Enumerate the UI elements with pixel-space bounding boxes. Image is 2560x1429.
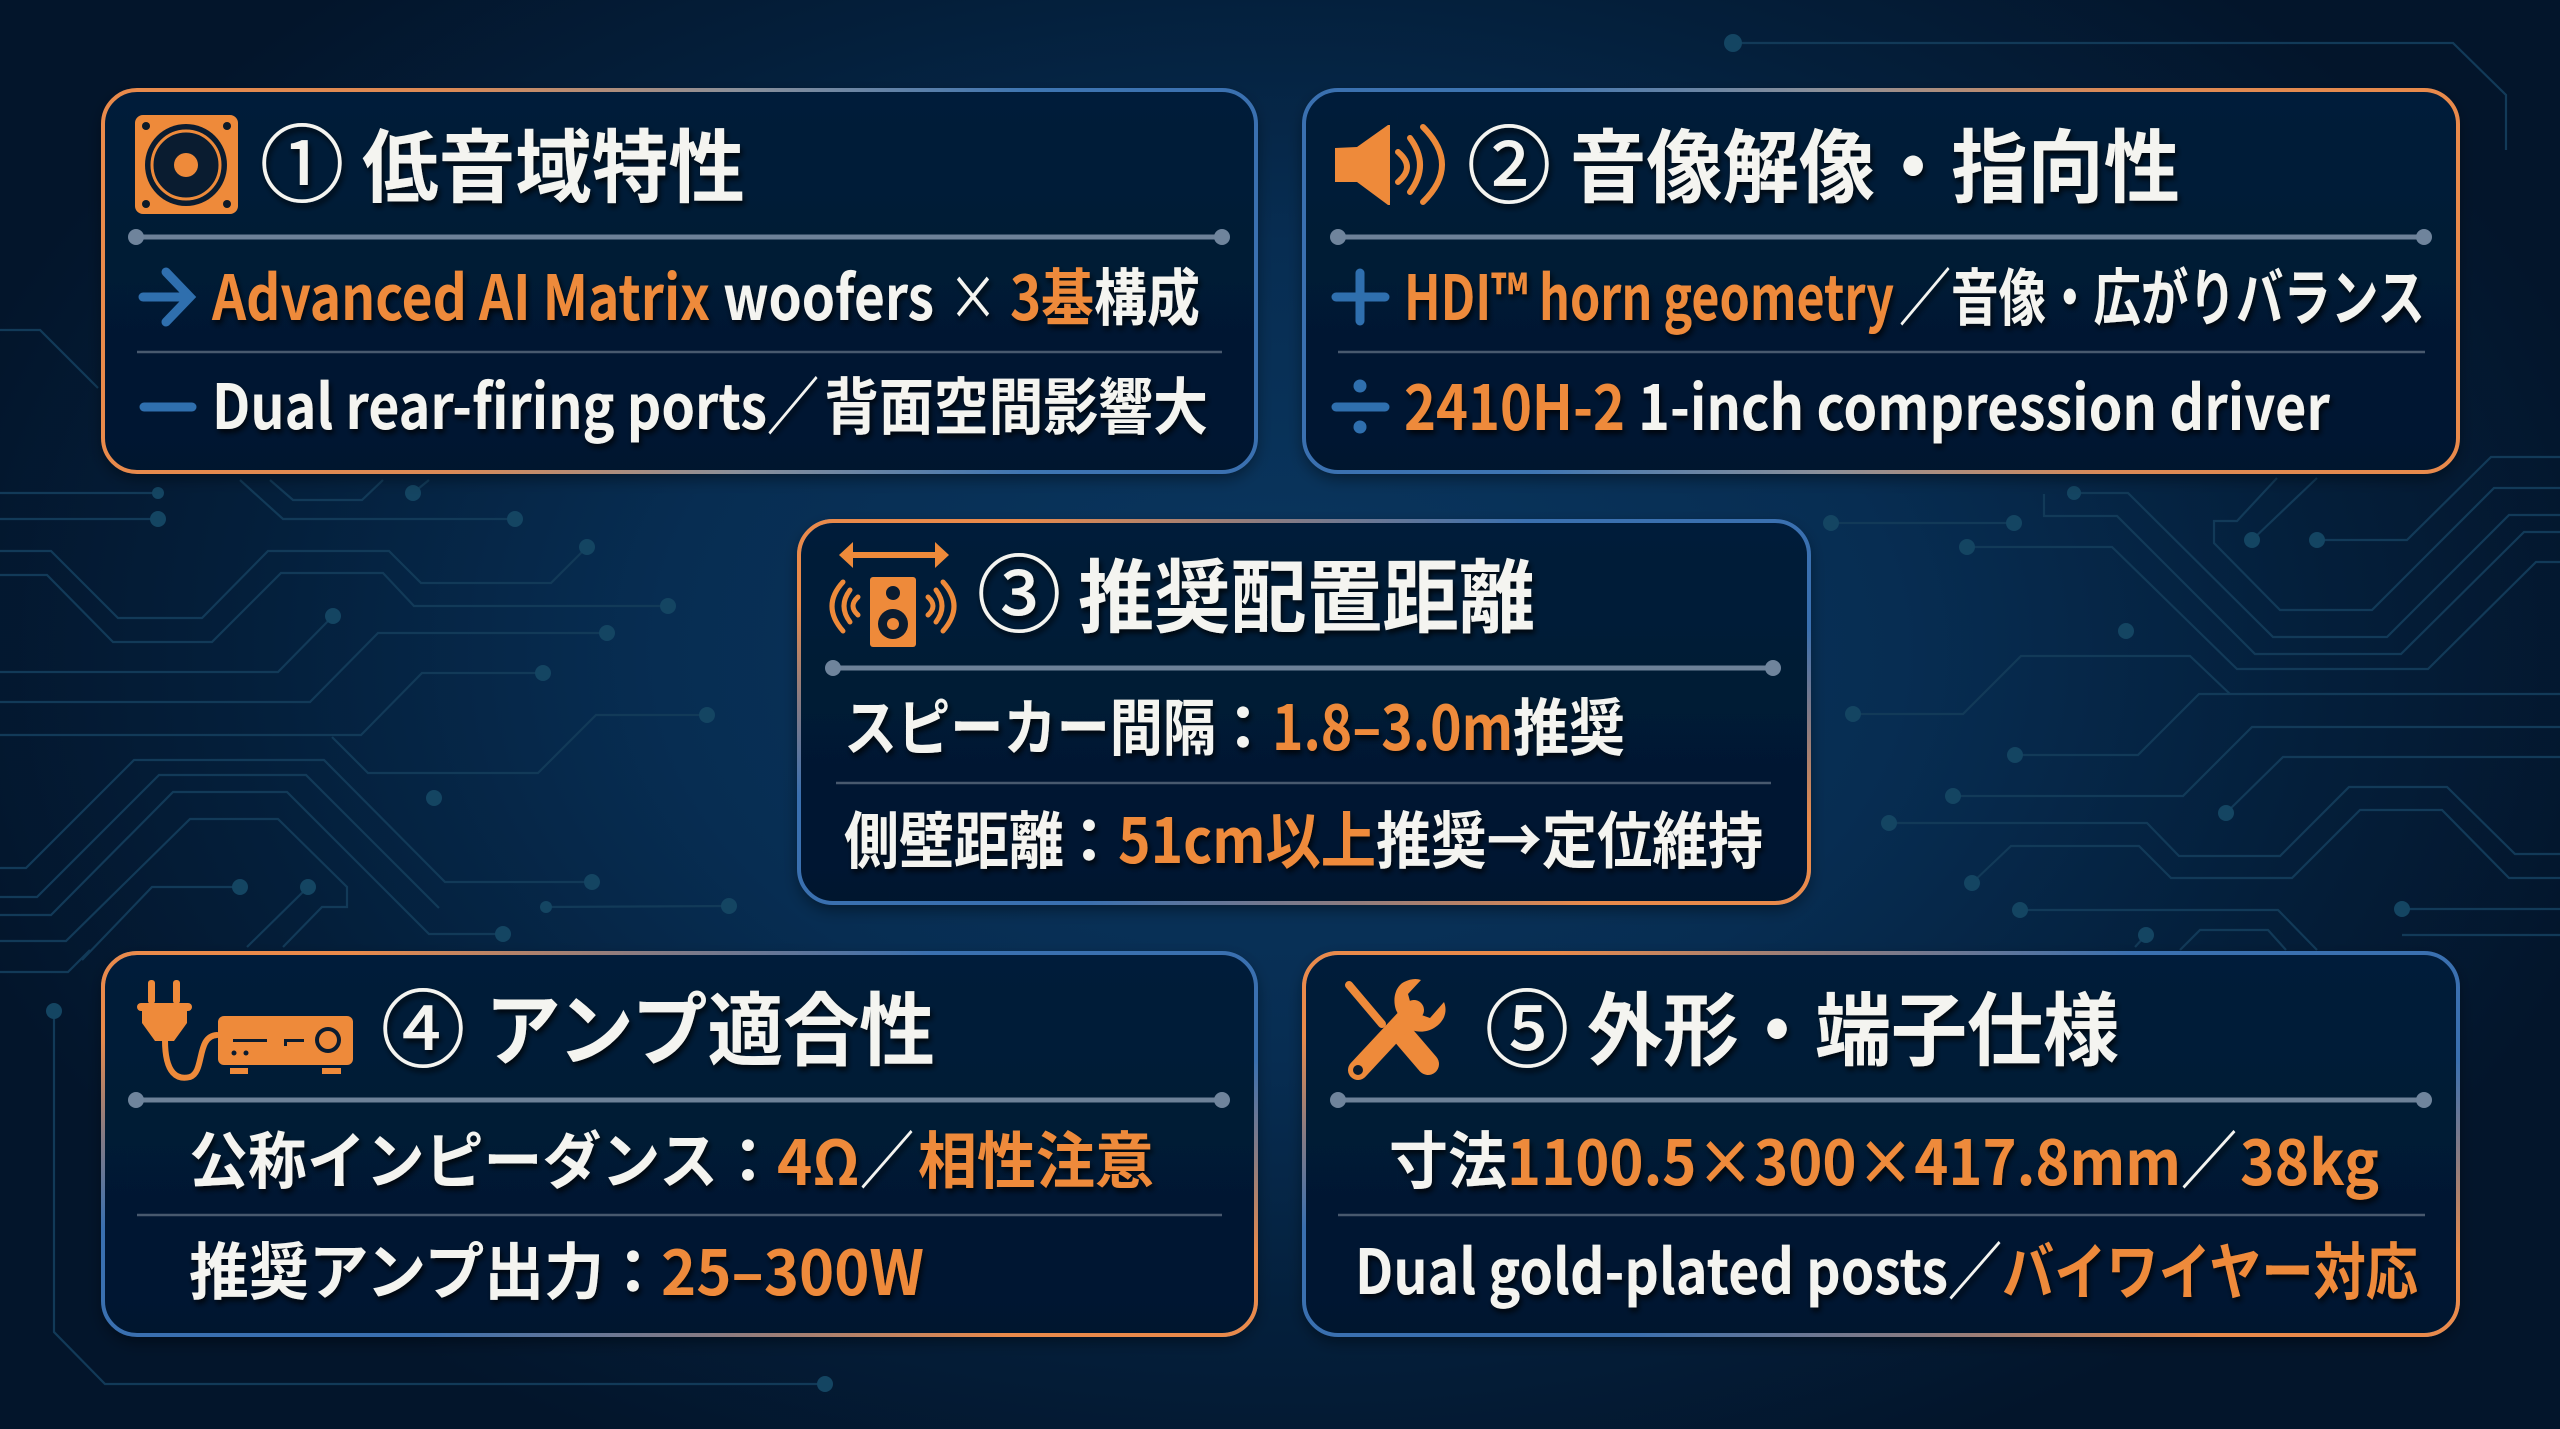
heading: 5: 外形・端子仕様 xyxy=(1587,967,2119,1083)
icon: wrench and screwdriver xyxy=(1349,979,1446,1075)
icon: speaker placement xyxy=(832,542,954,647)
heading: 1: 低音域特性 xyxy=(362,104,745,220)
icon: loudspeaker xyxy=(1335,125,1442,205)
heading: 3: 推奨配置距離 xyxy=(1078,534,1535,650)
text: nominal impedance: ／ xyxy=(860,1111,914,1201)
icon: minus bullet xyxy=(144,402,192,412)
text: recommended amp power: 25–300W xyxy=(661,1223,924,1313)
panel: 5 dimensions and terminals xyxy=(1304,953,2458,1335)
text: ports line: 背面空間影響大 xyxy=(824,357,1208,447)
heading: 2: ② xyxy=(1467,100,1551,221)
text: terminals: バイワイヤー対応 xyxy=(2002,1222,2418,1312)
text: terminals: Dual gold-plated posts xyxy=(1355,1222,1948,1312)
text: woofer line: 3基 xyxy=(1010,248,1094,338)
heading: 1: ① xyxy=(260,99,344,220)
text: speaker spacing xyxy=(844,678,1625,768)
text: dimensions and weight: 1100.5×300×417.8mm xyxy=(1507,1113,2181,1203)
text: driver line: 1-inch compression driver xyxy=(1638,358,2331,448)
text: ports line: Dual rear-firing ports xyxy=(212,357,767,447)
text: side wall distance: 推奨→定位維持 xyxy=(1376,791,1763,881)
text: dimensions and weight: 38kg xyxy=(2240,1113,2379,1203)
heading: 4: アンプ適合性 xyxy=(485,967,935,1083)
icon: woofer xyxy=(135,115,238,214)
text: nominal impedance: 公称インピーダンス xyxy=(189,1111,718,1201)
text: terminals xyxy=(1355,1222,2418,1312)
text: side wall distance: 側壁距離 xyxy=(844,791,1064,881)
icon: plus bullet xyxy=(1336,273,1385,321)
text: dimensions and weight: ／ xyxy=(2181,1111,2237,1201)
text: woofer line: × xyxy=(948,248,998,338)
text: driver line: 2410H-2 xyxy=(1404,358,1625,448)
text: woofer line: woofers xyxy=(723,248,934,338)
heading: 3: ③ xyxy=(977,529,1061,650)
panel: 2 imaging and directivity xyxy=(1304,90,2458,472)
text: woofer line xyxy=(211,248,1200,338)
text: speaker spacing: スピーカー間隔 xyxy=(844,678,1216,768)
panel: 1 low-frequency characteristics xyxy=(103,90,1256,472)
icon: plug and amplifier xyxy=(137,980,353,1078)
text: nominal impedance: 4Ω xyxy=(777,1113,860,1203)
text: horn line: HDI™ horn geometry xyxy=(1404,248,1894,338)
heading: 5: ⑤ xyxy=(1485,964,1569,1085)
text: horn line xyxy=(1404,248,2425,338)
text: driver line xyxy=(1404,358,2331,448)
panel: 3 recommended placement distance xyxy=(799,521,1809,903)
text: dimensions and weight: 寸法 xyxy=(1389,1111,1507,1201)
text: terminals: ／ xyxy=(1948,1222,2002,1312)
text: nominal impedance: 相性注意 xyxy=(918,1111,1154,1201)
text: woofer line: Advanced AI Matrix xyxy=(211,248,710,338)
text: recommended amp power: 推奨アンプ出力 xyxy=(189,1222,604,1312)
heading: 4: ④ xyxy=(381,964,465,1085)
text: recommended amp power: ： xyxy=(602,1222,664,1312)
text: nominal impedance: ： xyxy=(717,1111,779,1201)
text: nominal impedance xyxy=(189,1111,1154,1203)
icon: divide bullet xyxy=(1336,380,1385,434)
text: side wall distance: ： xyxy=(1058,791,1120,881)
text: horn line: 音像・広がりバランス xyxy=(1951,248,2425,338)
text: recommended amp power xyxy=(189,1222,924,1313)
text: woofer line: 構成 xyxy=(1094,248,1200,338)
heading: 2: 音像解像・指向性 xyxy=(1570,104,2180,220)
icon: arrow bullet xyxy=(143,272,190,322)
panel: 4 amplifier compatibility xyxy=(103,953,1256,1335)
text: horn line: ／ xyxy=(1899,248,1951,338)
text: ports line xyxy=(212,357,1208,447)
text: speaker spacing: 推奨 xyxy=(1513,678,1625,768)
text: speaker spacing: 1.8–3.0m xyxy=(1272,678,1513,768)
text: side wall distance: 51cm以上 xyxy=(1118,791,1376,881)
text: side wall distance xyxy=(844,791,1763,881)
text: ports line: ／ xyxy=(767,357,819,447)
text: speaker spacing: ： xyxy=(1212,678,1274,768)
